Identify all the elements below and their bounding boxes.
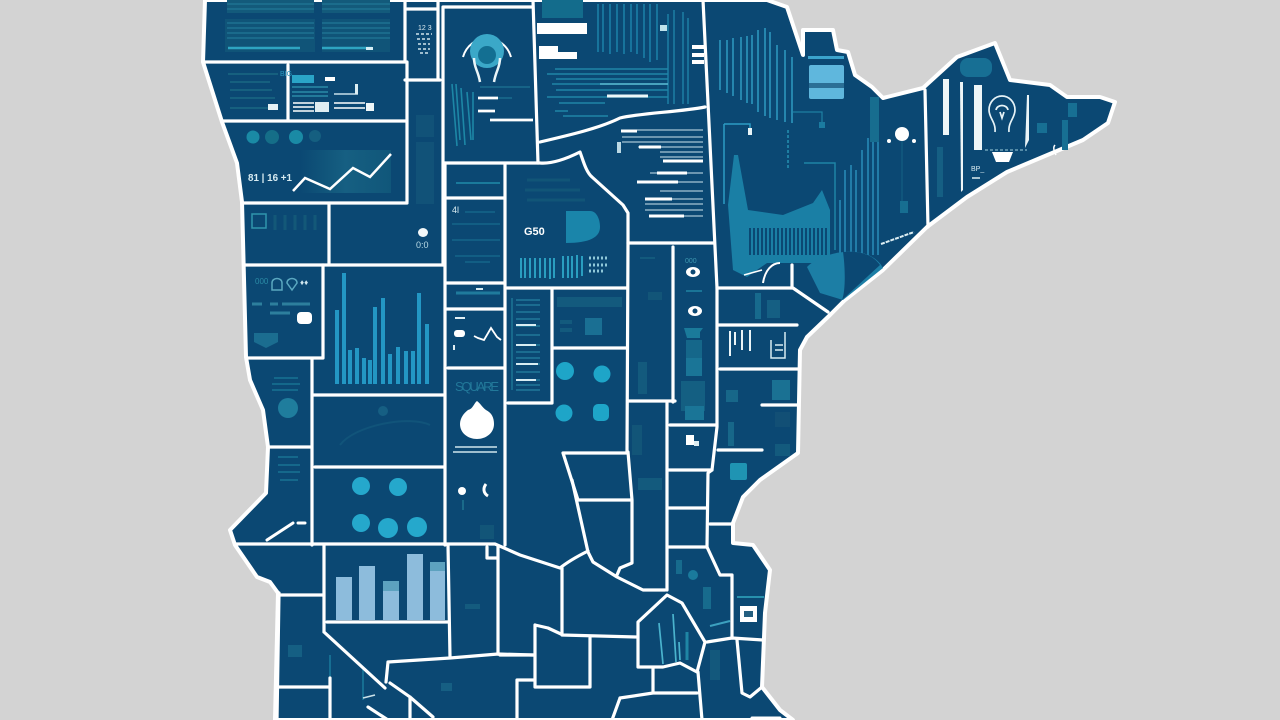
icon: lightbulb top center xyxy=(463,34,511,82)
panel: panel grid left: 000 xyxy=(255,277,269,286)
icon: white flame blob with label xyxy=(453,379,499,452)
panel: panel grid left: ♦♦ xyxy=(300,278,308,287)
panel: southern dim marks xyxy=(288,560,764,700)
chart: blue bar chart xyxy=(335,273,429,384)
panel: tall columns with eye icons: 000 xyxy=(685,258,697,265)
panel: empty dim map panel xyxy=(340,406,430,445)
map silhouette xyxy=(203,0,1115,720)
panel: line chart with dots xyxy=(246,130,391,193)
panel: right peninsula with bars and bulb: BP_ xyxy=(971,166,984,173)
panel: narrow column with list xyxy=(416,34,434,237)
icon: outlined bulb xyxy=(989,96,1015,132)
infographic: state map made of data panels xyxy=(201,0,1117,720)
panel: right peninsula with bars and bulb xyxy=(937,58,1077,197)
panel: small strips center left: 4l xyxy=(452,205,459,215)
panel: tall columns with eye icons xyxy=(632,258,705,490)
panel: top-left data tables xyxy=(225,0,390,52)
panel: teal square panel xyxy=(557,302,622,335)
chart: light blue bars xyxy=(336,554,445,620)
panel: line chart with dots: 81 | 16 +1 xyxy=(248,173,292,184)
panel: striped list xyxy=(512,298,540,390)
text snippets: BIG xyxy=(280,71,292,78)
panel: right stacked squares xyxy=(726,293,790,480)
panel: white icons xyxy=(458,484,494,539)
panel: small strips center left xyxy=(452,183,500,293)
panel: panel grid left xyxy=(252,214,429,348)
panel: four teal dots xyxy=(556,362,610,422)
panel: small tables row xyxy=(228,74,374,112)
text snippets xyxy=(280,25,432,78)
panel: stripes with white bars xyxy=(617,130,703,216)
text snippets: 12 3 xyxy=(418,25,432,32)
icon: white flame blob with label: SQUARE xyxy=(455,379,499,394)
panel: lines below bulb xyxy=(452,84,533,146)
panel: D shape with bars: G50 xyxy=(524,226,545,238)
panel: panel grid left: 0:0 xyxy=(416,240,429,250)
panel: D shape with bars xyxy=(521,180,607,279)
panel: big right teal area chart xyxy=(720,28,883,300)
icon: node diagram with white dots xyxy=(881,127,916,244)
panel: left small blob xyxy=(272,378,300,480)
chart: small line chart xyxy=(454,318,501,350)
map district borders xyxy=(204,0,928,720)
panel: top center lines xyxy=(537,0,704,116)
panel: five teal circles xyxy=(352,477,427,538)
icon: credit card block xyxy=(808,56,844,99)
